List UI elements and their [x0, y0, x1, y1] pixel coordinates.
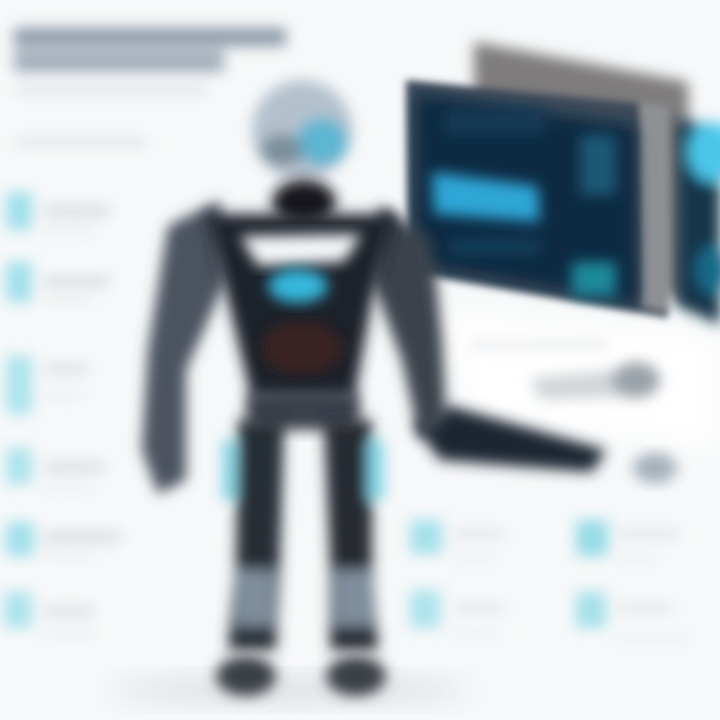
- item 1: [6, 192, 110, 232]
- item 6: [4, 592, 94, 636]
- right arm: [372, 205, 446, 440]
- rear monitor: [474, 42, 690, 300]
- middle monitor frame: [406, 80, 670, 318]
- left arm: [142, 200, 226, 494]
- small device: [633, 453, 677, 483]
- title block: [14, 28, 286, 146]
- torso: [206, 214, 396, 400]
- dark tablet: [414, 406, 606, 472]
- monitor group: [406, 42, 720, 483]
- desk surface: [440, 310, 720, 450]
- left feature list: [4, 192, 120, 636]
- item 2: [6, 262, 110, 302]
- item 4: [6, 448, 104, 490]
- chest core: [268, 269, 328, 303]
- keyboard and mouse: [470, 340, 660, 400]
- item 3: [6, 356, 88, 414]
- head: [252, 80, 352, 180]
- item B: [576, 520, 678, 562]
- right foot: [326, 656, 386, 696]
- monitor screen: [416, 94, 638, 304]
- item 5: [6, 522, 120, 558]
- abdomen: [262, 322, 342, 374]
- chest plate: [240, 234, 362, 266]
- side screen: [676, 120, 720, 325]
- item C: [410, 590, 504, 636]
- screen highlights: [432, 110, 616, 296]
- neck: [272, 180, 336, 224]
- left leg: [222, 420, 284, 650]
- item A: [410, 520, 504, 562]
- pelvis: [246, 390, 360, 430]
- right leg: [324, 420, 384, 650]
- ground shadow: [110, 678, 470, 702]
- lower right feature list: [410, 520, 688, 642]
- robot figure: [142, 80, 446, 696]
- left foot: [216, 656, 276, 696]
- item D: [576, 592, 688, 642]
